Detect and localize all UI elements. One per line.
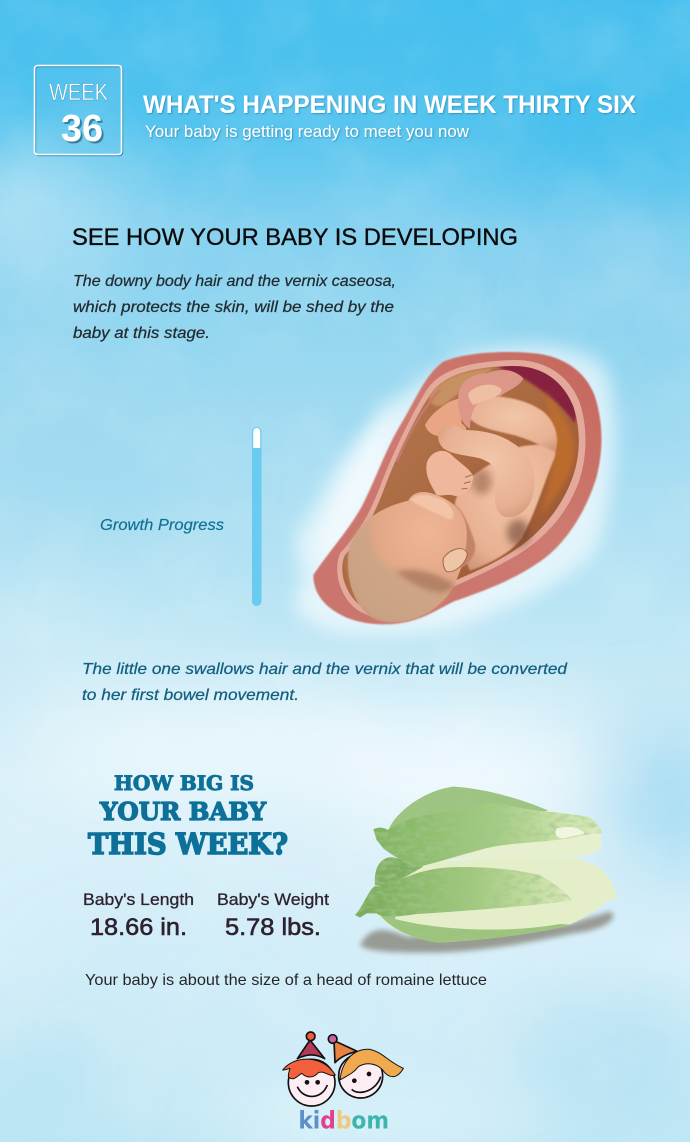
subtitle: Your baby is getting ready to meet you now [145,123,469,141]
right child [328,1035,403,1098]
lettuce shadow [360,912,613,953]
size comparison caption: Your baby is about the size of a head of romaine lettuce [85,972,487,989]
finger lines [462,475,472,489]
main title: WHAT'S HAPPENING IN WEEK THIRTY SIX [143,91,636,119]
face highlight [410,495,453,520]
top head back leaf [388,787,548,830]
baby head [348,492,467,622]
ear [443,549,467,572]
bottom head lower band [377,912,570,943]
lower leg at top [458,370,523,428]
week badge: 36 [61,108,103,150]
header [34,66,636,156]
development description: baby at this stage. [73,325,210,342]
baby's weight stat: 5.78 lbs. [225,914,321,941]
right side orange tissue [540,390,575,517]
development description: which protects the skin, will be shed by the [73,299,394,316]
baby body [454,437,557,571]
top head silhouette [373,787,602,867]
baby's length stat: Baby's Length [83,891,194,909]
left child [283,1032,335,1106]
week badge: WEEK [49,79,108,106]
top head pale inner leaf [555,827,585,838]
womb interior details [429,360,576,517]
how big heading [88,771,288,861]
growth progress label: Growth Progress [100,517,224,534]
illustration: baby in the womb [293,345,615,634]
development description [73,273,396,342]
logo [283,1032,403,1134]
how big heading: HOW BIG IS [114,771,254,795]
bottom head back leaf [375,857,423,887]
placenta [496,366,577,424]
other thigh [425,398,466,437]
shadow on torso [507,519,530,546]
illustration: romaine lettuce [355,787,617,953]
uterus wall [313,352,601,624]
baby's length stat: 18.66 in. [90,914,187,941]
bottom head front leaf [355,867,572,918]
umbilical cord [397,390,440,462]
growth progress bar [252,427,262,606]
arm [438,425,535,517]
baby's length stat [83,891,194,941]
womb glow [293,345,615,634]
baby's weight stat [217,891,329,941]
hair [348,517,455,621]
hand near mouth [426,451,473,496]
week badge [34,66,122,156]
bottom head silhouette [355,857,617,943]
how big heading: YOUR BABY [99,797,267,826]
chest shadow [472,469,492,494]
diagonal glow streak [293,393,400,573]
swallowing caption [82,661,568,704]
neck shadow [447,503,475,570]
how big heading: THIS WEEK? [88,827,288,861]
inner lining [337,360,585,617]
thigh [464,395,557,452]
development description: The downy body hair and the vernix caseosa, [73,273,396,290]
upper left membrane [429,368,493,406]
section heading: SEE HOW YOUR BABY IS DEVELOPING [72,224,518,251]
swallowing caption: to her first bowel movement. [82,687,299,704]
temple shadow [397,570,455,592]
top head front leaf [373,803,602,867]
wordmark: kidbom [298,1106,389,1134]
amniotic cavity [342,366,579,612]
foot at top [468,385,502,405]
baby's weight stat: Baby's Weight [217,891,329,909]
swallowing caption: The little one swallows hair and the vernix that will be converted [82,661,568,678]
